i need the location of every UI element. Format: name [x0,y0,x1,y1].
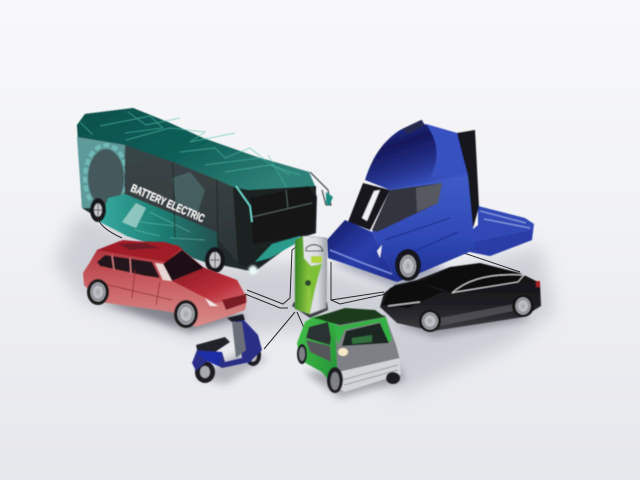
suv windshield [163,250,204,281]
vehicle: battery electric bus [77,108,333,274]
suv rear wheel [87,279,109,305]
smart rear left wheel [327,367,343,393]
station base [292,302,328,318]
truck spoiler [457,130,479,228]
smart rear body [335,315,401,392]
scooter body [192,318,262,371]
smart side window [306,322,331,345]
truck nose [327,220,397,282]
truck cab roof [365,120,468,190]
bus lower teal band [100,194,220,262]
sedan lower body highlight [440,303,520,326]
bus panel seams [173,162,218,258]
vehicle: red suv [83,240,247,328]
suv body [83,240,247,327]
charging cables [98,218,520,349]
suv door lines [100,270,172,305]
suv hood [172,268,247,303]
bus dark side panels [125,145,238,262]
bus rear wheel [90,198,106,222]
vehicle: scooter [192,314,262,383]
station display [311,256,322,263]
truck cab side [372,176,474,282]
truck rear bed [462,206,534,256]
smart rear window [342,323,389,346]
scooter handlebar [227,314,245,322]
bus front [233,186,316,270]
station green panel [295,236,310,314]
suv roof [97,241,182,262]
truck side windows [372,183,442,232]
vehicle: black sedan [380,263,541,332]
vehicle: green smart car [297,308,401,393]
smart door [306,340,331,362]
bus front wheel [205,247,225,273]
sedan windows [420,264,524,293]
smart side body [297,312,338,392]
scooter seat [196,337,230,354]
suv headlight and grille [222,294,246,310]
bus side teal graphic [172,172,205,212]
bus roof [77,108,316,191]
station body [295,236,327,314]
smart chrome bumper [338,358,401,392]
smart rear right wheel [386,372,400,384]
sedan front wheel [419,310,441,332]
bus rear panel with wheel graphic [77,137,125,216]
bus headlight [248,266,258,274]
floor shadows [55,212,555,398]
smart roof [313,308,385,325]
bus base silhouette [77,108,317,272]
truck windshield [348,183,390,230]
suv front wheel [174,300,198,328]
charging station [292,236,328,318]
bus label: BATTERY ELECTRIC [129,183,206,225]
station car icon [306,245,323,251]
smart taillight [338,348,348,356]
sedan rear wheel [512,295,534,317]
smart front left wheel [297,344,307,364]
scooter front wheel [245,344,261,366]
scooter rear wheel [195,361,215,383]
sedan tail light [536,281,540,287]
truck wheel [395,249,421,281]
bus front lower teal panel [255,236,302,262]
bus roof circuit lines [80,112,300,188]
suv side windows [97,255,160,278]
vehicle: electric truck [327,120,534,282]
bus mirror [310,172,331,205]
sedan hood [382,281,442,308]
station plug socket [305,280,311,286]
